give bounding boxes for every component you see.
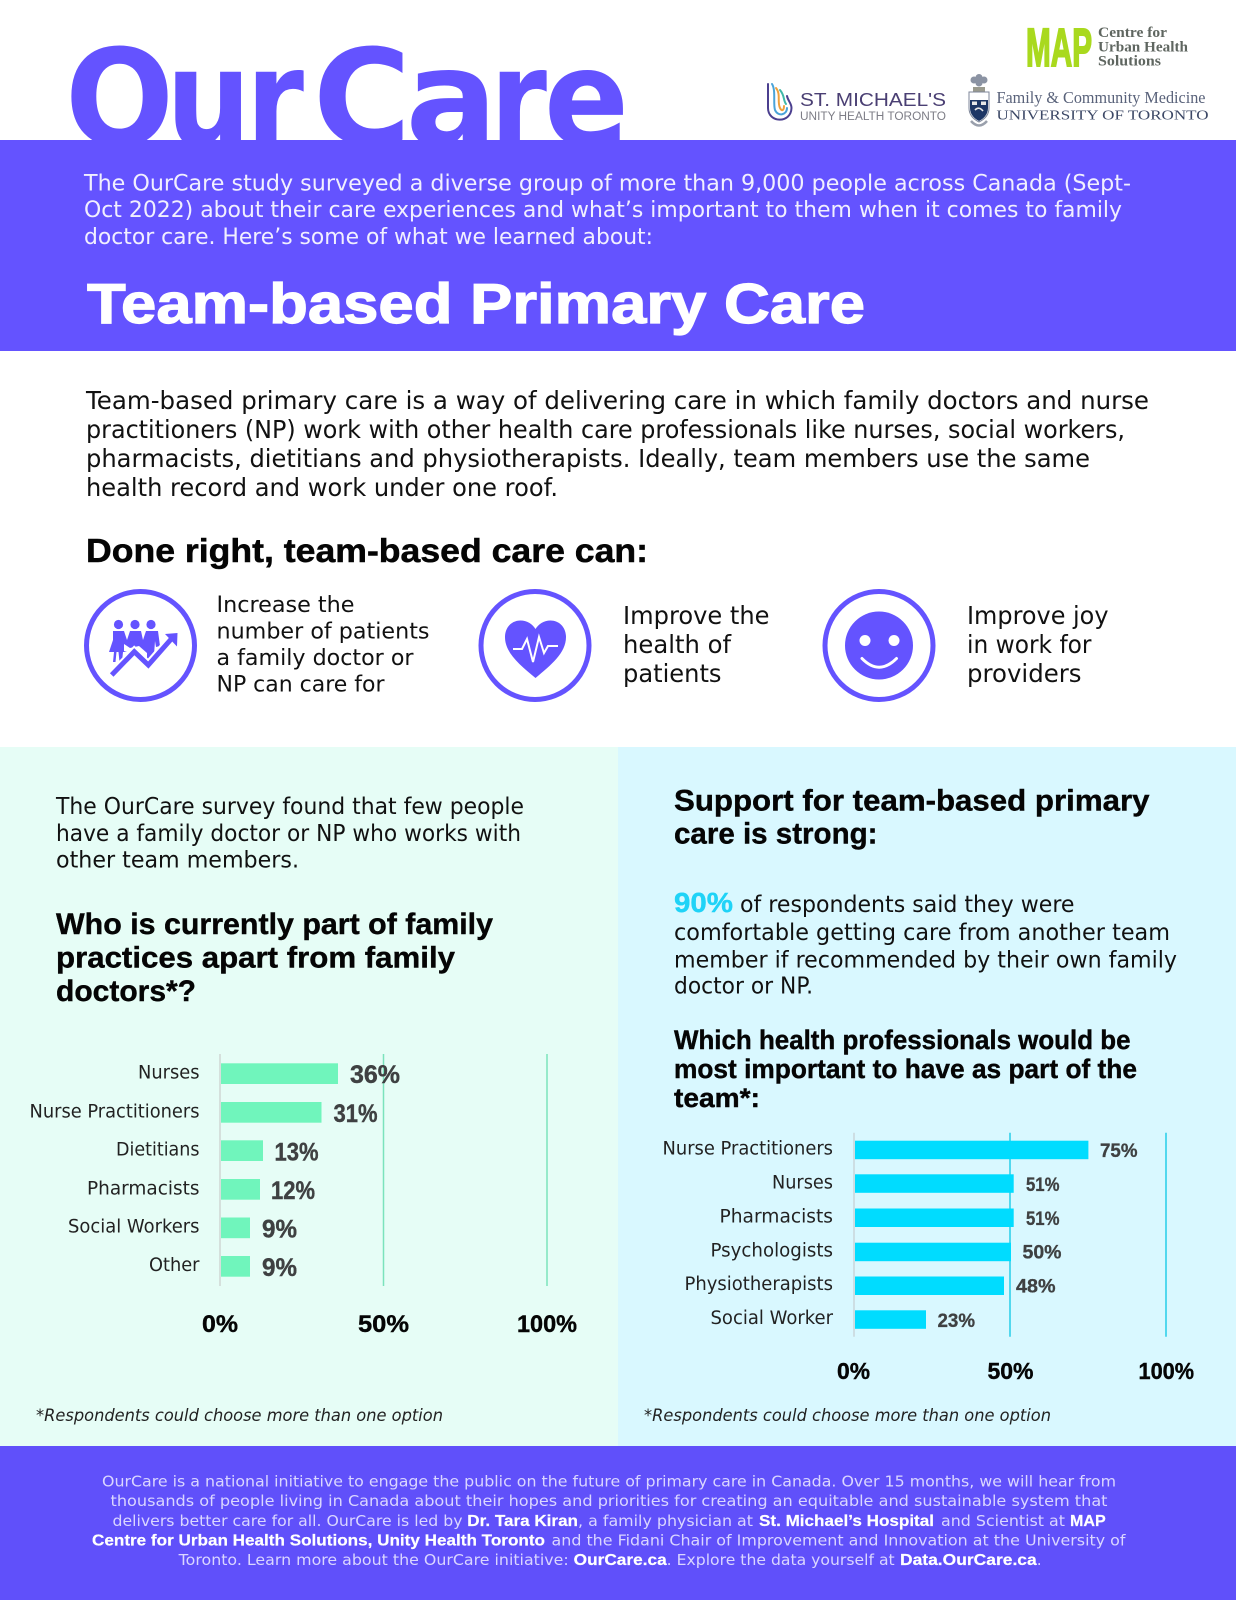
chart values: 9% (262, 1254, 297, 1282)
chart values (262, 1061, 400, 1282)
text block: 90 percent comfortable: 90% (674, 887, 733, 918)
chart values: 9% (262, 1216, 297, 1244)
chart axis labels: 50% (988, 1358, 1034, 1384)
heading: which professionals: Which health professionals would be (674, 1025, 1130, 1055)
text block: about OurCare: Centre for Urban Health Solutions, Unity Health Toronto (92, 1532, 545, 1550)
heading: Done right: Done right, team-based care can: (86, 532, 648, 569)
chart values: 12% (271, 1177, 315, 1205)
bar chart: most important professionals (662, 1133, 1194, 1384)
text: improve joy: Improve joy (967, 601, 1108, 630)
heading: who is currently part (56, 908, 493, 1008)
chart axis labels: 0% (202, 1311, 238, 1338)
panel: header banner (0, 140, 1236, 351)
title: OurCare wordmark: a (406, 21, 498, 177)
logo: St. Michael's Unity Health Toronto (768, 84, 946, 123)
logo: University of Toronto Family and Community Medicine: Family & Community Medicine (996, 88, 1206, 107)
text block: about OurCare: and Scientist at (941, 1512, 1065, 1530)
heading: who is currently part: Who is currently part of family (56, 908, 493, 941)
logo: MAP Centre for Urban Health Solutions: Urban Health (1098, 40, 1188, 56)
text: increase patients (216, 592, 430, 698)
icon: people and rising arrow (86, 592, 194, 700)
heading: Team-based Primary Care: Team-based Primary Care (87, 272, 865, 336)
text: increase patients: number of patients (216, 618, 430, 644)
heading: which professionals: team*: (674, 1083, 760, 1113)
heading: support is strong (674, 784, 1150, 850)
chart labels: professionals: Social Worker (710, 1308, 833, 1329)
chart values: 13% (274, 1138, 318, 1166)
chart labels: roles: Social Workers (68, 1216, 200, 1238)
chart values: 48% (1016, 1276, 1056, 1298)
chart axis labels: 100% (1138, 1358, 1194, 1384)
text block: 90 percent comfortable: of respondents said they were (740, 892, 1074, 918)
chart labels: professionals: Physiotherapists (684, 1274, 833, 1295)
text block: survey finding: The OurCare survey found that few people (55, 794, 524, 820)
panel: footer (0, 1446, 1236, 1600)
logo: MAP Centre for Urban Health Solutions: Solutions (1098, 54, 1161, 70)
text block: about OurCare: MAP (1070, 1513, 1106, 1530)
panel: current team members (0, 747, 618, 1446)
chart values: 50% (1022, 1242, 1062, 1264)
text block: about OurCare: St. Michael’s Hospital (759, 1513, 934, 1530)
chart values: 31% (334, 1100, 378, 1128)
chart axis labels: 0% (837, 1358, 870, 1384)
text block: about OurCare: Toronto. Learn more about the OurCare initiative: (178, 1551, 569, 1569)
heading: support is strong: Support for team-based primary (674, 784, 1150, 818)
chart labels: roles (30, 1062, 200, 1276)
panel: support for team-based care (618, 747, 1236, 1446)
text block: study introduction (83, 172, 1131, 250)
logo: University of Toronto Family and Community Medicine (969, 74, 1208, 126)
logo: St. Michael's Unity Health Toronto: ST. MICHAEL'S (800, 89, 946, 110)
text block: about OurCare: and the Fidani Chair of Improvement and Innovation at the University of (552, 1532, 1126, 1550)
chart values: 23% (938, 1310, 975, 1332)
heading: who is currently part: doctors*? (56, 975, 196, 1008)
heading: which professionals: most important to have as part of the (674, 1054, 1137, 1084)
bar chart: current team members (30, 1054, 577, 1338)
text: improve health: patients (623, 659, 722, 688)
chart axis labels: 50% (358, 1311, 409, 1338)
chart labels: roles: Other (149, 1254, 200, 1276)
text: increase patients: NP can care for (216, 672, 385, 698)
text block: definition of team-based care: practitioners (NP) work with other health care professionals like nurses, social workers, (86, 415, 1125, 444)
chart labels: roles: Nurse Practitioners (30, 1100, 200, 1122)
text block: about OurCare (92, 1472, 1126, 1569)
logo: University of Toronto Family and Community Medicine: UNIVERSITY OF TORONTO (996, 108, 1208, 124)
title: OurCare wordmark: C (313, 21, 411, 177)
icon: smiley face (825, 592, 933, 700)
title: OurCare wordmark: u (166, 21, 251, 177)
text: increase patients: a family doctor or (216, 645, 414, 671)
text block: about OurCare: , a family physician at (578, 1512, 753, 1530)
text block: about OurCare: Data.OurCare.ca (900, 1552, 1037, 1569)
chart axis labels (837, 1358, 1194, 1384)
text block: about OurCare: . (1037, 1551, 1042, 1569)
text block: survey finding: have a family doctor or NP who works with (56, 821, 521, 847)
chart values: 51% (1026, 1208, 1060, 1230)
text block: 90 percent comfortable: member if recommended by their own family (674, 948, 1177, 974)
text: improve health: health of (623, 630, 732, 659)
chart values (938, 1140, 1138, 1332)
title: OurCare wordmark: O (65, 21, 174, 177)
chart labels: roles: Pharmacists (87, 1178, 200, 1200)
title: OurCare wordmark: e (544, 21, 629, 177)
chart labels: professionals: Nurses (772, 1172, 833, 1194)
text: improve health: Improve the (623, 601, 770, 630)
chart values: 51% (1026, 1174, 1060, 1196)
chart values: 36% (350, 1061, 400, 1089)
text block: definition of team-based care: health record and work under one roof. (86, 473, 558, 502)
chart labels: professionals: Psychologists (710, 1240, 833, 1262)
text block: about OurCare: OurCare is a national initiative to engage the public on the future of primary care in Canada. Over 15 months, we will hear from (102, 1472, 1116, 1490)
text block: about OurCare: . Explore the data yourself at (667, 1551, 895, 1569)
text block: 90 percent comfortable: comfortable getting care from another team (674, 920, 1170, 946)
title: OurCare wordmark (71, 46, 623, 140)
text block: definition of team-based care: pharmacists, dietitians and physiotherapists. Ideally, team members use the same (86, 444, 1090, 473)
heading: which professionals (674, 1025, 1137, 1113)
chart labels: professionals: Nurse Practitioners (662, 1138, 833, 1160)
text block: survey finding (55, 794, 524, 874)
text block: about OurCare: Dr. Tara Kiran (467, 1513, 578, 1530)
text block: definition of team-based care: Team-based primary care is a way of delivering care in which family doctors and nurse (85, 386, 1149, 415)
logo: MAP Centre for Urban Health Solutions: MAP (1026, 18, 1092, 78)
heading: support is strong: care is strong: (674, 818, 878, 850)
chart labels: professionals: Pharmacists (720, 1206, 833, 1228)
title: OurCare wordmark: r (490, 21, 547, 177)
chart labels: roles: Nurses (138, 1062, 200, 1084)
text block: about OurCare: OurCare.ca (574, 1552, 667, 1569)
footnote: right panel: *Respondents could choose more than one option (644, 1406, 1051, 1425)
text block: about OurCare: thousands of people living in Canada about their hopes and priorities for creating an equitable and sustainable system that (110, 1492, 1108, 1510)
text: increase patients: Increase the (216, 592, 354, 618)
text block: study introduction: Oct 2022) about their care experiences and what’s important to them when it comes to family (84, 198, 1122, 223)
text block: study introduction: doctor care. Here’s some of what we learned about: (84, 225, 653, 250)
text: improve joy (967, 601, 1108, 688)
text: improve health (623, 601, 770, 688)
heading: who is currently part: practices apart from family (56, 942, 455, 974)
footnote: left panel: *Respondents could choose more than one option (36, 1406, 443, 1425)
chart values: 75% (1100, 1140, 1138, 1162)
chart axis labels: 100% (517, 1311, 577, 1338)
text block: study introduction: The OurCare study surveyed a diverse group of more than 9,000 people across Canada (Sept- (83, 172, 1131, 196)
text block: about OurCare: delivers better care for all. OurCare is led by (112, 1512, 463, 1530)
chart axis labels (202, 1311, 577, 1338)
text: improve joy: in work for (967, 630, 1092, 659)
text block: 90 percent comfortable: doctor or NP. (674, 974, 813, 1000)
chart labels: roles: Dietitians (116, 1138, 200, 1160)
icon: heart with pulse (481, 592, 589, 700)
chart labels: professionals (662, 1138, 833, 1329)
text block: 90 percent comfortable (674, 887, 1177, 1000)
text block: definition of team-based care (85, 386, 1149, 502)
title: OurCare wordmark: r (246, 21, 304, 177)
logo: MAP Centre for Urban Health Solutions: Centre for (1098, 25, 1168, 41)
logo: St. Michael's Unity Health Toronto: UNITY HEALTH TORONTO (800, 111, 946, 123)
text block: survey finding: other team members. (56, 848, 299, 874)
text: improve joy: providers (967, 659, 1082, 688)
